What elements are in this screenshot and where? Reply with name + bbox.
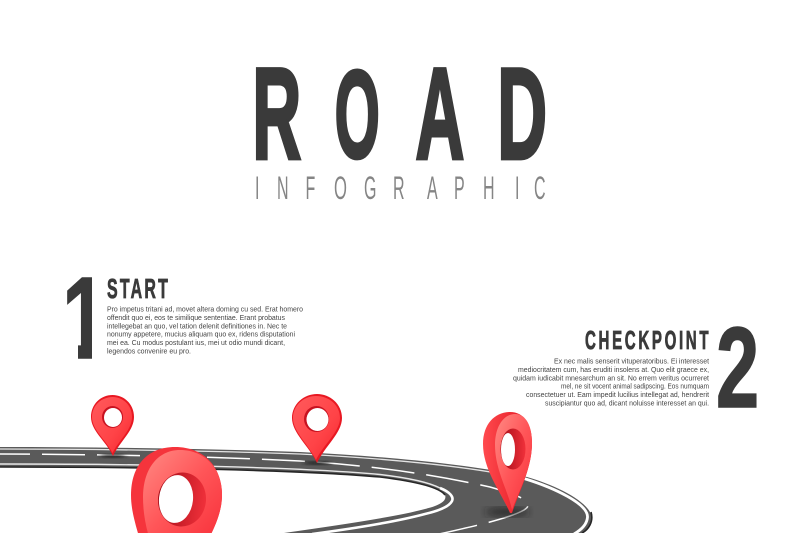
- body text: start: mei ea. Cu modus postulant ius, mei ut odio mundi dicant,: [107, 340, 285, 347]
- road edge lines: [0, 449, 524, 478]
- body text: checkpoint: mel, ne sit vocent animal sadipscing. Eos numquam: [561, 384, 709, 391]
- subtitle: INFOGRAPHIC: O: [334, 171, 347, 207]
- body text: checkpoint: mediocritatem cum, has eruditi insolens at. Quo elit graece ex,: [518, 367, 709, 374]
- heading: START: START: [107, 274, 168, 304]
- subtitle: INFOGRAPHIC: N: [277, 171, 289, 207]
- subtitle: INFOGRAPHIC: P: [454, 171, 465, 207]
- body text: start: offendit quo ei, eos te similique sententiae. Erant probatus: [107, 315, 285, 322]
- pin 4: large foreground: [131, 447, 222, 533]
- road centre dashes: [0, 454, 528, 533]
- step 2: checkpoint: [513, 304, 759, 432]
- subtitle: INFOGRAPHIC: C: [534, 171, 546, 207]
- road surface: [0, 447, 592, 533]
- title: ROAD: O: [335, 45, 380, 184]
- subtitle: INFOGRAPHIC: I: [515, 171, 519, 207]
- pin 2: small: [292, 394, 342, 465]
- body text: checkpoint: [513, 358, 709, 407]
- road: [0, 447, 592, 533]
- heading: CHECKPOINT: CHECKPOINT: [585, 326, 709, 355]
- title: ROAD: [252, 41, 547, 187]
- road dark outer edge: [0, 467, 592, 533]
- title: ROAD: R: [252, 41, 301, 186]
- body text: start: nonumy appetere, mucius aliquam quo ex, ridens disputationi: [107, 332, 295, 339]
- subtitle: INFOGRAPHIC: F: [306, 171, 315, 207]
- subtitle: INFOGRAPHIC: R: [393, 171, 405, 207]
- subtitle: INFOGRAPHIC: G: [364, 171, 376, 207]
- subtitle: INFOGRAPHIC: H: [483, 171, 495, 207]
- number 1: 1: [62, 255, 108, 383]
- body text: start: intellegebat an quo, vel tation delenit definitiones in. Nec te: [107, 323, 287, 330]
- subtitle: INFOGRAPHIC: [255, 171, 546, 207]
- body text: checkpoint: Ex nec malis senserit vituperatoribus. Ei interesset: [554, 358, 709, 366]
- title: ROAD: D: [497, 42, 547, 187]
- body text: checkpoint: suscipiantur quo ad, dicant noluisse interesset an qui.: [545, 400, 709, 407]
- body text: start: legendos convenire eu pro.: [107, 348, 191, 355]
- subtitle: INFOGRAPHIC: A: [427, 171, 438, 207]
- pin 1: small: [91, 395, 134, 458]
- subtitle: INFOGRAPHIC: I: [255, 171, 259, 207]
- number 2: 2: [716, 304, 759, 432]
- body text: start: Pro impetus tritani ad, movet altera doming cu sed. Erat homero: [107, 306, 303, 314]
- body text: checkpoint: quidam iudicabit mnesarchum an sit. No errem veritus ocurreret: [513, 375, 709, 382]
- body text: checkpoint: consectetuer ut. Eam impedit lucilius intellegat ad, hendrerit: [526, 392, 709, 399]
- title: ROAD: A: [416, 41, 464, 186]
- body text: start: [107, 306, 303, 355]
- step 1: start: [67, 277, 303, 359]
- pin 3: checkpoint in perspective: [483, 412, 532, 517]
